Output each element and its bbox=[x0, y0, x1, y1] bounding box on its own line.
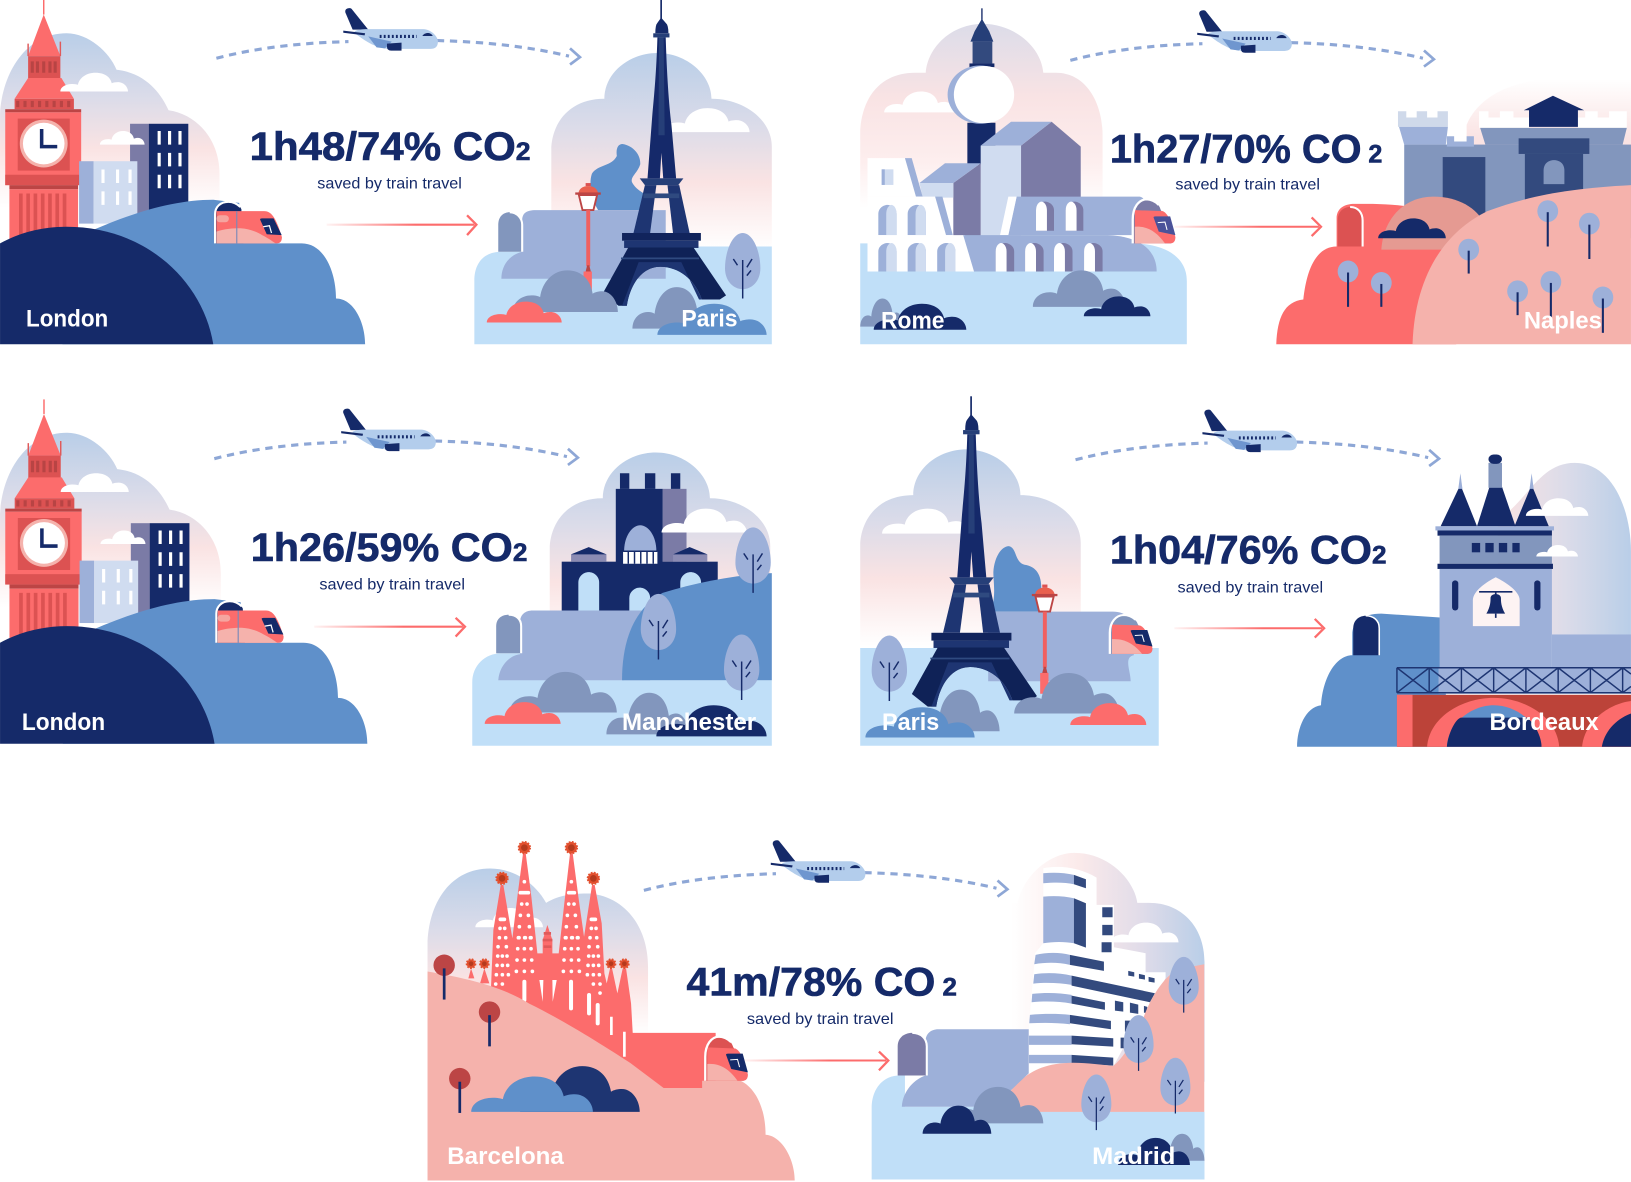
cloud bbox=[662, 509, 747, 533]
icon: Eiffel Tower bbox=[603, 0, 726, 306]
label: London: London bbox=[22, 709, 105, 736]
hill: blue bbox=[622, 573, 772, 680]
sky: Paris bbox=[551, 53, 772, 250]
panel: Rome to Naples bbox=[860, 8, 1631, 344]
ground: light blue bbox=[872, 1075, 1205, 1180]
headline: 41m/78% CO 2 bbox=[687, 960, 957, 1004]
London scene bbox=[0, 399, 367, 744]
label: Naples: Naples bbox=[1524, 308, 1602, 335]
cloud bbox=[884, 92, 955, 112]
flight path with plane bbox=[214, 409, 578, 465]
bush bbox=[510, 672, 617, 712]
ground: light blue bbox=[860, 648, 1159, 746]
ground: light blue bbox=[474, 247, 772, 344]
ground: light blue bbox=[860, 243, 1187, 344]
icon: Eiffel Tower bbox=[912, 396, 1037, 707]
icon: bell tower bbox=[1435, 455, 1631, 671]
building: tall house bbox=[920, 122, 1081, 236]
icon: lamp bbox=[575, 183, 601, 292]
tunnel bbox=[498, 210, 666, 279]
cloud bbox=[1536, 545, 1578, 556]
icon: train bbox=[1110, 615, 1153, 654]
buildings: London bbox=[80, 523, 189, 623]
tunnel bbox=[988, 612, 1134, 681]
sky: Manchester bbox=[550, 452, 770, 649]
icon: train bbox=[215, 202, 282, 243]
sky: London bbox=[0, 433, 221, 607]
tree bbox=[433, 955, 455, 1000]
hill: navy bbox=[0, 626, 215, 744]
label: London: London bbox=[26, 306, 108, 333]
cloud bbox=[61, 473, 129, 492]
tree bbox=[735, 527, 771, 593]
headline: 1h04/76% CO 2 bbox=[1110, 528, 1387, 572]
bush bbox=[949, 1087, 1043, 1123]
tree bbox=[1169, 957, 1199, 1013]
cloud bbox=[882, 509, 969, 534]
flight path with plane bbox=[1070, 10, 1434, 67]
bush bbox=[874, 304, 966, 330]
icon: Big Ben bbox=[5, 0, 81, 243]
trees: lollipop bbox=[1338, 200, 1613, 333]
hill: red bbox=[1276, 204, 1456, 344]
tree bbox=[872, 636, 907, 701]
subheading: saved by train travel bbox=[317, 175, 462, 192]
panel: London to Paris bbox=[0, 0, 772, 344]
hill: dusty pink bbox=[1381, 197, 1484, 250]
subheading: saved by train travel bbox=[1177, 579, 1323, 596]
sky: Rome bbox=[860, 24, 1103, 208]
hill: blue bbox=[62, 200, 365, 344]
tree bbox=[1124, 1015, 1154, 1071]
panel: Barcelona to Madrid bbox=[428, 840, 1205, 1181]
arrow bbox=[1174, 619, 1324, 638]
tree bbox=[724, 634, 759, 700]
tree bbox=[1081, 1074, 1111, 1130]
icon: Sagrada Familia bbox=[467, 842, 633, 1097]
Colosseum right bbox=[963, 197, 1157, 271]
subheading: saved by train travel bbox=[1175, 176, 1320, 193]
icon: train bbox=[216, 601, 284, 643]
tunnel mouth bbox=[1338, 207, 1363, 247]
sky: Madrid bbox=[1011, 853, 1205, 1082]
bush: blue bbox=[590, 144, 644, 210]
label: Paris: Paris bbox=[681, 306, 737, 333]
headline: 1h26/59% CO 2 bbox=[251, 526, 527, 570]
bush: navy bbox=[1378, 218, 1446, 238]
tree bbox=[641, 594, 676, 659]
cloud bbox=[100, 530, 145, 544]
label: Paris: Paris bbox=[882, 709, 939, 736]
bush bbox=[1033, 270, 1125, 307]
bush bbox=[1158, 1134, 1205, 1161]
panel: London to Manchester bbox=[0, 399, 772, 746]
sky: Barcelona bbox=[428, 869, 648, 1035]
icon: Madrid building bbox=[1029, 867, 1166, 1078]
icon: train bbox=[1133, 199, 1175, 243]
icon: lamp bbox=[1032, 585, 1057, 694]
hill: blue bbox=[63, 599, 367, 744]
icon: cathedral bbox=[562, 473, 718, 614]
bush bbox=[860, 299, 903, 327]
bush bbox=[485, 702, 561, 724]
label: Bordeaux: Bordeaux bbox=[1490, 709, 1599, 736]
cloud bbox=[1111, 923, 1179, 942]
tree bbox=[449, 1068, 470, 1113]
arrow bbox=[327, 215, 476, 235]
hill: navy bbox=[0, 227, 213, 344]
sky: Paris bbox=[860, 449, 1081, 646]
tunnel mouth bbox=[1353, 616, 1379, 655]
cloud bbox=[662, 108, 750, 132]
bush bbox=[606, 693, 689, 734]
tunnel bbox=[496, 611, 650, 680]
tunnel: red bbox=[614, 1033, 716, 1088]
subheading: saved by train travel bbox=[747, 1011, 894, 1028]
bush bbox=[918, 690, 1000, 731]
arrow bbox=[1174, 217, 1321, 236]
headline: 1h27/70% CO 2 bbox=[1110, 127, 1382, 171]
label: Barcelona: Barcelona bbox=[447, 1143, 564, 1170]
flight path with plane bbox=[216, 8, 580, 64]
ground: light blue bbox=[472, 653, 772, 746]
tree bbox=[479, 1001, 500, 1046]
label: Madrid: Madrid bbox=[1092, 1143, 1175, 1170]
label: Rome: Rome bbox=[881, 308, 944, 335]
flight path with plane bbox=[644, 840, 1007, 897]
tunnel bbox=[898, 1029, 1029, 1107]
bush bbox=[632, 287, 718, 329]
bush bbox=[1014, 673, 1119, 714]
tree bbox=[725, 233, 760, 299]
bush bbox=[513, 270, 618, 312]
hill: pink bbox=[1413, 185, 1631, 344]
bush bbox=[657, 304, 767, 335]
bush bbox=[1070, 703, 1146, 725]
bush: blue bbox=[990, 546, 1041, 612]
cloud bbox=[475, 908, 543, 927]
cloud bbox=[1526, 498, 1588, 516]
bush bbox=[656, 705, 767, 736]
arrow bbox=[314, 618, 465, 637]
bush bbox=[923, 1106, 991, 1134]
tree bbox=[1160, 1058, 1190, 1114]
icon: train bbox=[705, 1037, 748, 1081]
flight path with plane bbox=[1076, 410, 1439, 466]
headline: 1h48/74% CO 2 bbox=[250, 125, 531, 169]
icon: castle bbox=[1398, 96, 1631, 238]
bush bbox=[487, 302, 562, 322]
bush bbox=[1084, 296, 1150, 316]
cloud bbox=[100, 131, 145, 145]
arrow bbox=[745, 1052, 888, 1070]
panel: Paris to Bordeaux bbox=[860, 396, 1631, 747]
Colosseum left bbox=[868, 158, 974, 271]
sky: Naples bbox=[1467, 79, 1631, 198]
subheading: saved by train travel bbox=[319, 576, 465, 593]
hill: pink bbox=[428, 971, 795, 1181]
hill: pink bbox=[1009, 964, 1204, 1115]
buildings: London bbox=[79, 124, 188, 224]
icon: Big Ben bbox=[5, 399, 82, 643]
bush bbox=[1118, 1138, 1190, 1165]
icon: dome tower bbox=[948, 8, 1014, 164]
bush: navy bbox=[520, 1066, 640, 1112]
hill: blue bbox=[1297, 614, 1446, 747]
sky: London bbox=[0, 33, 220, 208]
bush: blue bbox=[471, 1077, 593, 1112]
icon: bridge bbox=[1397, 668, 1631, 747]
label: Manchester: Manchester bbox=[622, 709, 756, 736]
cloud bbox=[60, 73, 128, 92]
sky: Bordeaux bbox=[1498, 463, 1631, 634]
bush bbox=[865, 707, 975, 737]
